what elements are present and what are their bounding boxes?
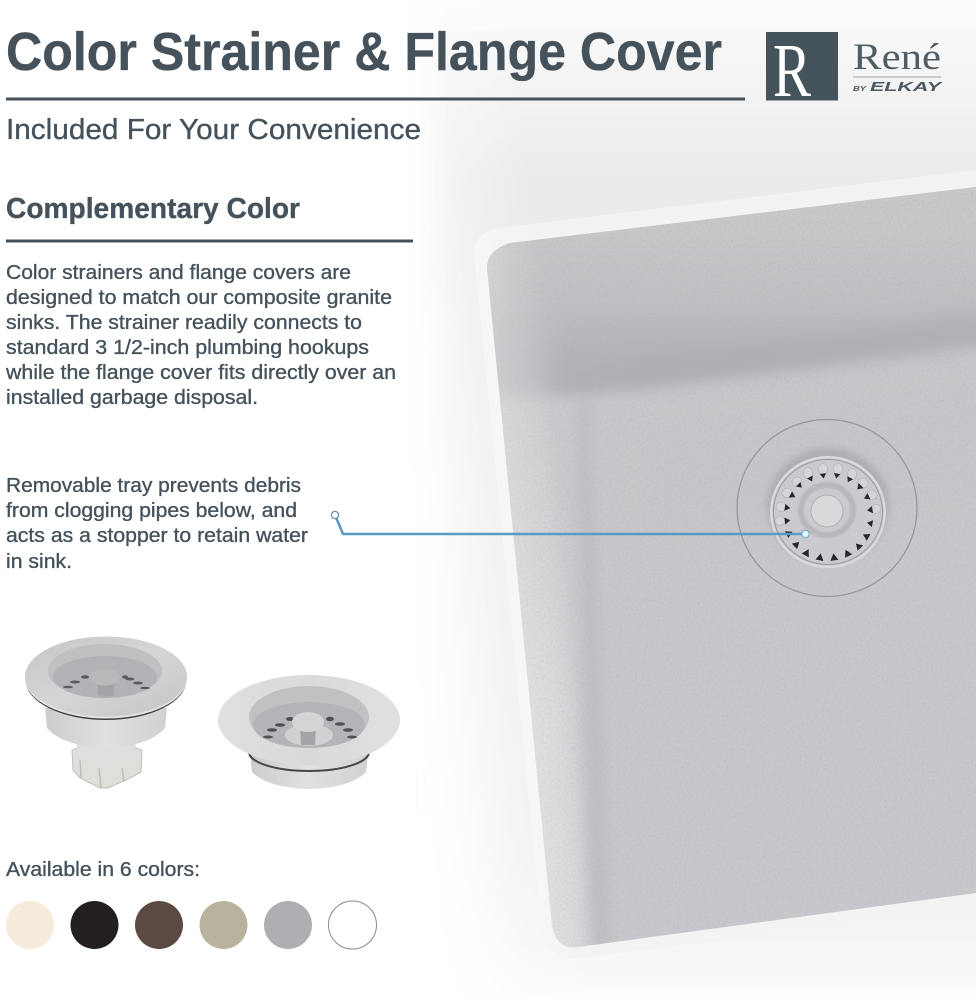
description paragraph — [5, 261, 396, 409]
cover slots — [263, 717, 357, 738]
cover flange — [218, 675, 400, 765]
cover dark ring — [249, 733, 369, 771]
logo mark: R — [773, 29, 811, 113]
sink photograph — [441, 46, 976, 958]
knob — [97, 680, 115, 696]
sink basin — [487, 187, 976, 948]
logo: Rene by Elkay: ELKAY — [870, 80, 944, 94]
logo: Rene by Elkay: BY — [853, 84, 867, 93]
threaded nut — [72, 748, 142, 788]
callout text: in sink. — [6, 550, 72, 573]
subtitle: Included For Your Convenience — [6, 114, 421, 146]
faint drip — [416, 770, 428, 816]
strainer basket — [771, 457, 885, 567]
description paragraph: sinks. The strainer readily connects to — [6, 311, 362, 334]
product: flange cover — [218, 675, 400, 789]
basket slots dark — [784, 473, 873, 561]
callout text: from clogging pipes below, and — [6, 499, 297, 522]
flange underside — [26, 640, 186, 720]
callout leader line — [331, 511, 809, 538]
strainer neck — [76, 742, 136, 762]
basket slots — [63, 675, 150, 689]
description paragraph: while the flange cover fits directly over an — [5, 361, 396, 384]
logo: Rene by Elkay — [766, 29, 944, 113]
flange ring — [737, 420, 917, 596]
section rule — [6, 240, 413, 242]
logo wordmark: René — [853, 37, 941, 78]
sink rim — [474, 170, 976, 958]
basket slots light — [775, 464, 881, 526]
center post — [801, 485, 853, 535]
description paragraph: Color strainers and flange covers are — [6, 261, 351, 284]
cover knob — [300, 725, 316, 745]
callout text: Removable tray prevents debris — [6, 474, 301, 497]
product: basket strainer — [25, 636, 187, 788]
section heading: Complementary Color — [6, 193, 300, 225]
description paragraph: standard 3 1/2-inch plumbing hookups — [6, 336, 369, 359]
description paragraph: designed to match our composite granite — [6, 286, 392, 309]
available colors label: Available in 6 colors: — [6, 858, 200, 881]
cover lower body — [250, 755, 368, 789]
drain strainer in sink — [737, 420, 917, 596]
white fade — [400, 0, 600, 999]
title rule — [6, 98, 745, 100]
strainer body — [45, 708, 167, 748]
color swatches — [6, 901, 376, 949]
title: Color Strainer & Flange Cover — [6, 22, 722, 82]
description paragraph: installed garbage disposal. — [6, 386, 258, 409]
flange top — [25, 636, 187, 716]
callout text: acts as a stopper to retain water — [6, 524, 308, 547]
callout text — [6, 474, 308, 573]
